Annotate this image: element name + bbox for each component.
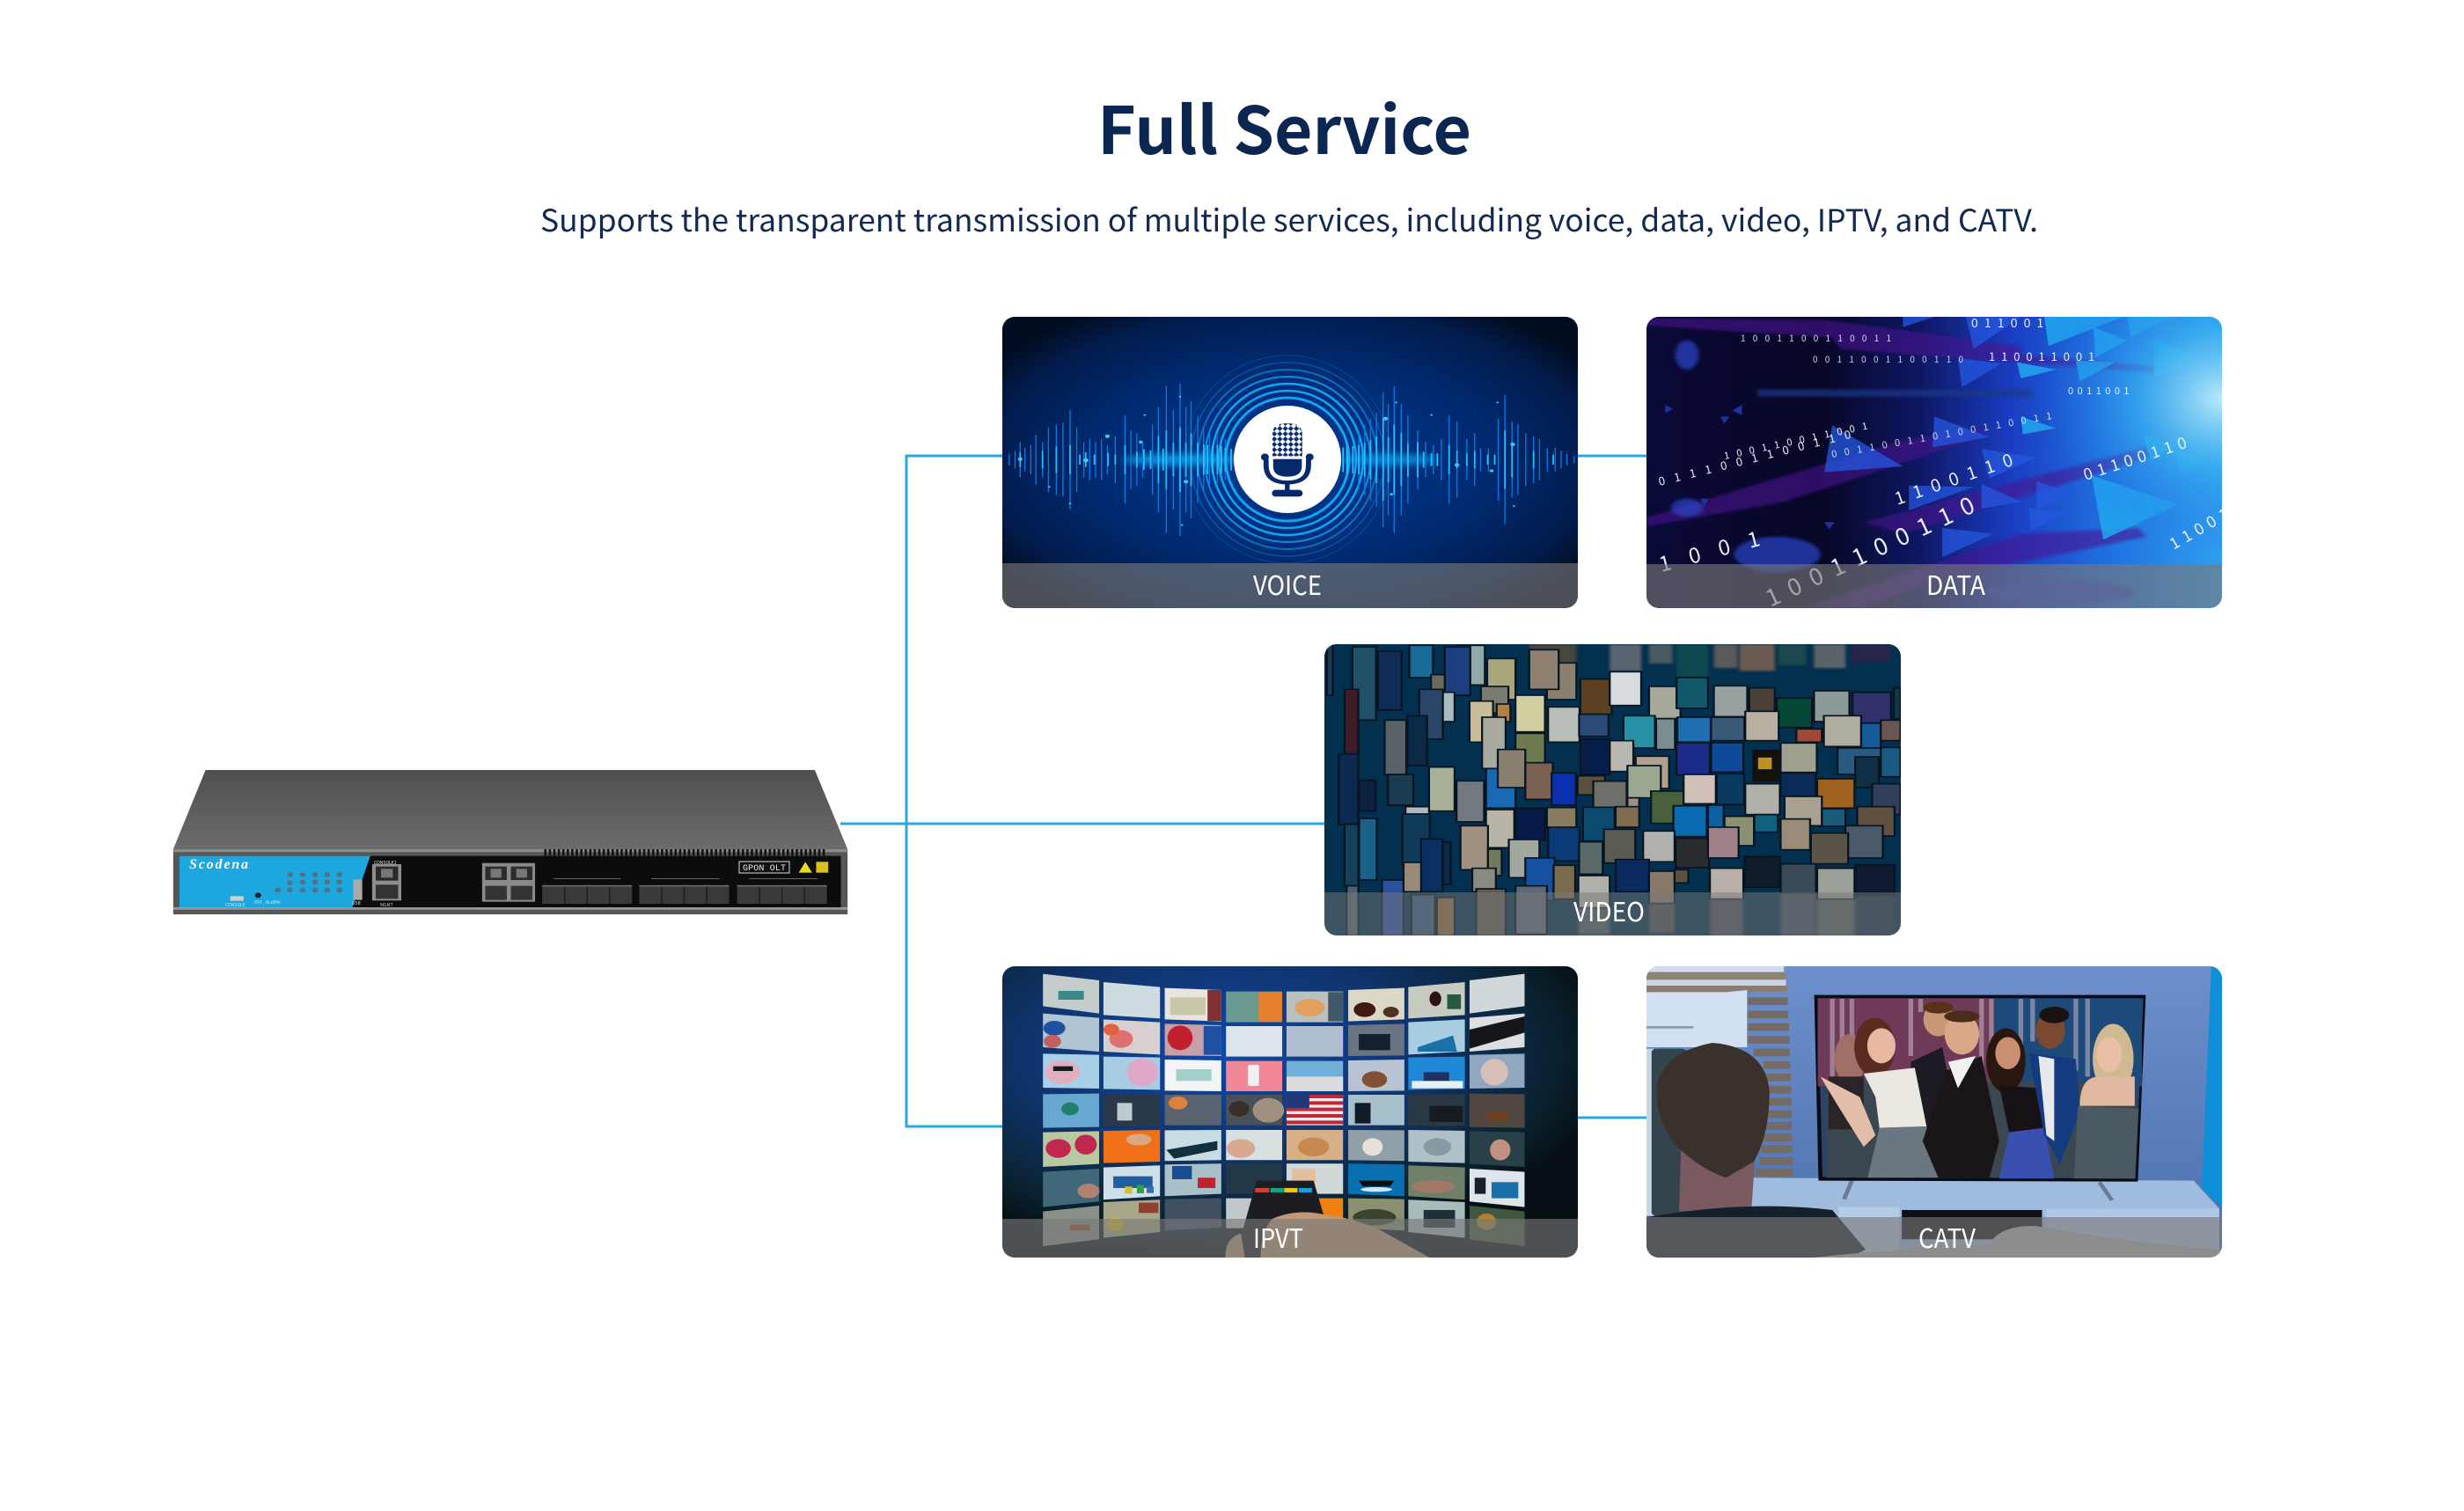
ventilation slots [546,849,824,856]
GPON OLT badge: GPON OLT [743,864,786,874]
IPTV label band: IPVT [1253,1217,1303,1256]
status LEDs [275,872,342,892]
port labels: USB [352,900,362,906]
panel: data [1646,314,2246,613]
data label band: DATA [1926,564,1986,603]
panel: CATV [1646,966,2222,1258]
ethernet ports [482,863,535,902]
binary digits: 1 0 0 1 1 0 0 1 1 0 0 1 [1723,418,1872,463]
data glow [2054,317,2222,524]
panel: video [1324,644,1901,935]
title: Full Service [1097,79,1471,173]
CATV room [1646,966,2222,1258]
binary digits: 0 0 1 1 0 0 1 [2068,384,2130,398]
binary digits: 0 1 1 0 0 1 1 0 [2080,430,2190,486]
sound waveform [1009,384,1574,536]
IPTV screen wall [1043,974,1524,1258]
video background [1324,644,1901,935]
warning labels [799,862,828,873]
voice label band: VOICE [1253,564,1322,603]
binary digits: 1 1 0 0 1 1 0 [1891,445,2019,510]
port labels: CONSOLE [225,902,246,908]
subtitle: Supports the transparent transmission of multiple services, including voice, data, video, IPTV, and CATV. [540,196,2038,241]
data shapes [1646,317,2205,608]
port labels [225,860,397,908]
port labels: MGMT [380,902,393,908]
data background [1646,317,2222,608]
data label band [1646,564,2222,608]
remote control and hand [1225,1181,1429,1258]
sound rings [1184,356,1391,563]
device: GPON OLT [173,770,847,914]
television [1815,995,2145,1182]
TV people [1821,1001,2138,1178]
icon: microphone in white circle [1234,406,1341,513]
connector lines [840,456,1647,1126]
IPTV label band [1002,1217,1578,1258]
port labels: ALARM [266,899,280,906]
console ports [231,864,401,901]
binary digits: 1 0 0 1 1 0 0 1 1 0 [1759,485,1982,613]
video label band: VIDEO [1573,891,1645,929]
binary digits: 0 0 1 1 0 0 1 1 0 1 0 0 1 1 0 0 1 1 [1830,408,2056,461]
SFP ports [542,878,827,904]
CATV label band [1646,1217,2222,1258]
IPTV background [1002,966,1578,1258]
binary digits: 1 1 0 0 1 1 0 0 1 [1989,348,2096,364]
binary digits: 1 1 0 0 1 1 [2165,495,2246,554]
binary digits: 0 1 1 1 0 0 1 1 0 0 1 1 0 [1656,424,1856,489]
binary digits: 0 0 1 1 0 0 1 1 0 0 1 1 0 [1813,352,1966,365]
black face plate [180,856,841,907]
video wall tiles [1327,644,1901,935]
device front frame [173,849,847,914]
binary digits: 0 1 1 0 0 1 [1971,314,2045,332]
blue brand panel [180,856,370,907]
tile photo details [1044,990,1524,1231]
brand name: Scodena [189,857,248,872]
voice background [1002,317,1578,608]
device top cover [173,770,847,849]
binary digits: 1 0 0 1 [1655,519,1770,578]
port labels: RST [254,899,262,906]
CATV label band: CATV [1918,1217,1976,1256]
video label band [1324,891,1901,935]
GPON OLT badge [739,862,789,874]
panel: voice [1002,317,1578,608]
panel: IPTV [1002,966,1578,1258]
binary digits [1655,314,2246,613]
port labels: CONSOLE1 [374,860,397,866]
viewer and sofa [1646,1043,2221,1258]
binary digits: 1 0 0 1 1 0 0 1 1 0 0 1 1 [1741,331,1894,344]
voice label band [1002,563,1578,608]
